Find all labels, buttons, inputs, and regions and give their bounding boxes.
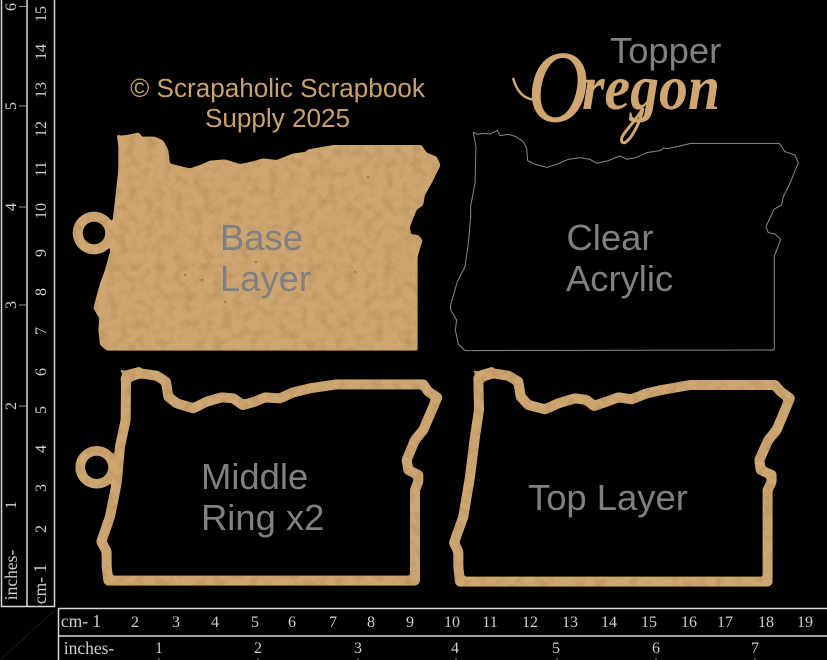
vertical ruler: 2 — [33, 525, 50, 533]
vertical ruler: 3 — [3, 301, 20, 309]
horizontal ruler: 4 — [211, 614, 219, 631]
vertical ruler: inches- — [1, 550, 21, 600]
horizontal ruler: 19 — [797, 614, 813, 631]
vertical ruler: cm- 1 — [30, 564, 50, 604]
horizontal ruler: 1 — [155, 640, 163, 657]
clear acrylic label: Clear — [566, 217, 653, 258]
horizontal ruler: 7 — [751, 640, 759, 657]
base layer label: Base — [220, 217, 303, 258]
vertical ruler: 4 — [33, 445, 50, 453]
horizontal ruler: 17 — [717, 614, 733, 631]
vertical ruler: 5 — [3, 102, 20, 110]
panel: base layer: Layer — [220, 258, 311, 299]
topper label: Topper — [610, 30, 721, 71]
panel: clear acrylic — [451, 130, 798, 351]
topper: Oregon script word: O — [528, 31, 588, 144]
horizontal ruler — [58, 608, 827, 660]
vertical ruler: 10 — [33, 203, 50, 219]
base layer shape with ring tab — [73, 132, 441, 351]
vertical ruler: 2 — [3, 402, 20, 410]
horizontal ruler: 12 — [522, 614, 538, 631]
horizontal ruler: 8 — [367, 614, 375, 631]
vertical ruler: 13 — [33, 82, 50, 98]
clear acrylic outline — [451, 130, 798, 351]
horizontal ruler: 18 — [758, 614, 774, 631]
horizontal ruler: 10 — [444, 614, 460, 631]
vertical ruler: 7 — [33, 327, 50, 335]
horizontal ruler: 14 — [601, 614, 617, 631]
vertical ruler: 5 — [33, 406, 50, 414]
horizontal ruler: 2 — [254, 640, 262, 657]
vertical ruler: 6 — [33, 368, 50, 376]
horizontal ruler: 3 — [354, 640, 362, 657]
vertical ruler: 3 — [33, 484, 50, 492]
horizontal ruler: 6 — [288, 614, 296, 631]
vertical ruler: 8 — [33, 288, 50, 296]
top layer label: Top Layer — [528, 477, 688, 518]
vertical ruler: 6 — [3, 3, 20, 11]
horizontal ruler: inches- — [64, 638, 114, 658]
vertical ruler: 1 — [3, 501, 20, 509]
vertical ruler: 12 — [33, 121, 50, 137]
horizontal ruler: cm- 1 — [61, 611, 101, 631]
base layer speckles — [184, 176, 369, 303]
top layer outline — [454, 367, 790, 582]
vertical ruler: 11 — [33, 161, 50, 177]
middle ring outline — [75, 367, 437, 581]
vertical ruler: 4 — [3, 203, 20, 211]
panel: middle ring — [75, 367, 437, 581]
topper: Oregon script word: regon — [582, 52, 720, 123]
horizontal ruler: 2 — [131, 614, 139, 631]
horizontal ruler: 13 — [562, 614, 578, 631]
vertical ruler — [0, 0, 55, 660]
horizontal ruler: 9 — [406, 614, 414, 631]
middle ring label: Middle — [201, 456, 308, 497]
horizontal ruler: 5 — [251, 614, 259, 631]
panel: clear acrylic: Acrylic — [566, 258, 673, 299]
horizontal ruler: 15 — [641, 614, 657, 631]
panel: middle ring: Ring x2 — [201, 497, 324, 538]
copyright notice: © Scrapaholic Scrapbook — [130, 73, 426, 103]
panel: base layer — [73, 132, 441, 351]
vertical ruler: 9 — [33, 249, 50, 257]
vertical ruler: 15 — [33, 6, 50, 22]
horizontal ruler: 3 — [172, 614, 180, 631]
horizontal ruler: 11 — [482, 614, 498, 631]
topper: Oregon script word — [513, 31, 720, 144]
panel: top layer — [454, 367, 790, 582]
copyright notice — [130, 73, 426, 133]
horizontal ruler: 7 — [329, 614, 337, 631]
vertical ruler: 14 — [33, 44, 50, 60]
horizontal ruler: 4 — [451, 640, 459, 657]
horizontal ruler: 6 — [652, 640, 660, 657]
horizontal ruler: 5 — [552, 640, 560, 657]
horizontal ruler: 16 — [681, 614, 697, 631]
copyright notice: Supply 2025 — [205, 103, 350, 133]
